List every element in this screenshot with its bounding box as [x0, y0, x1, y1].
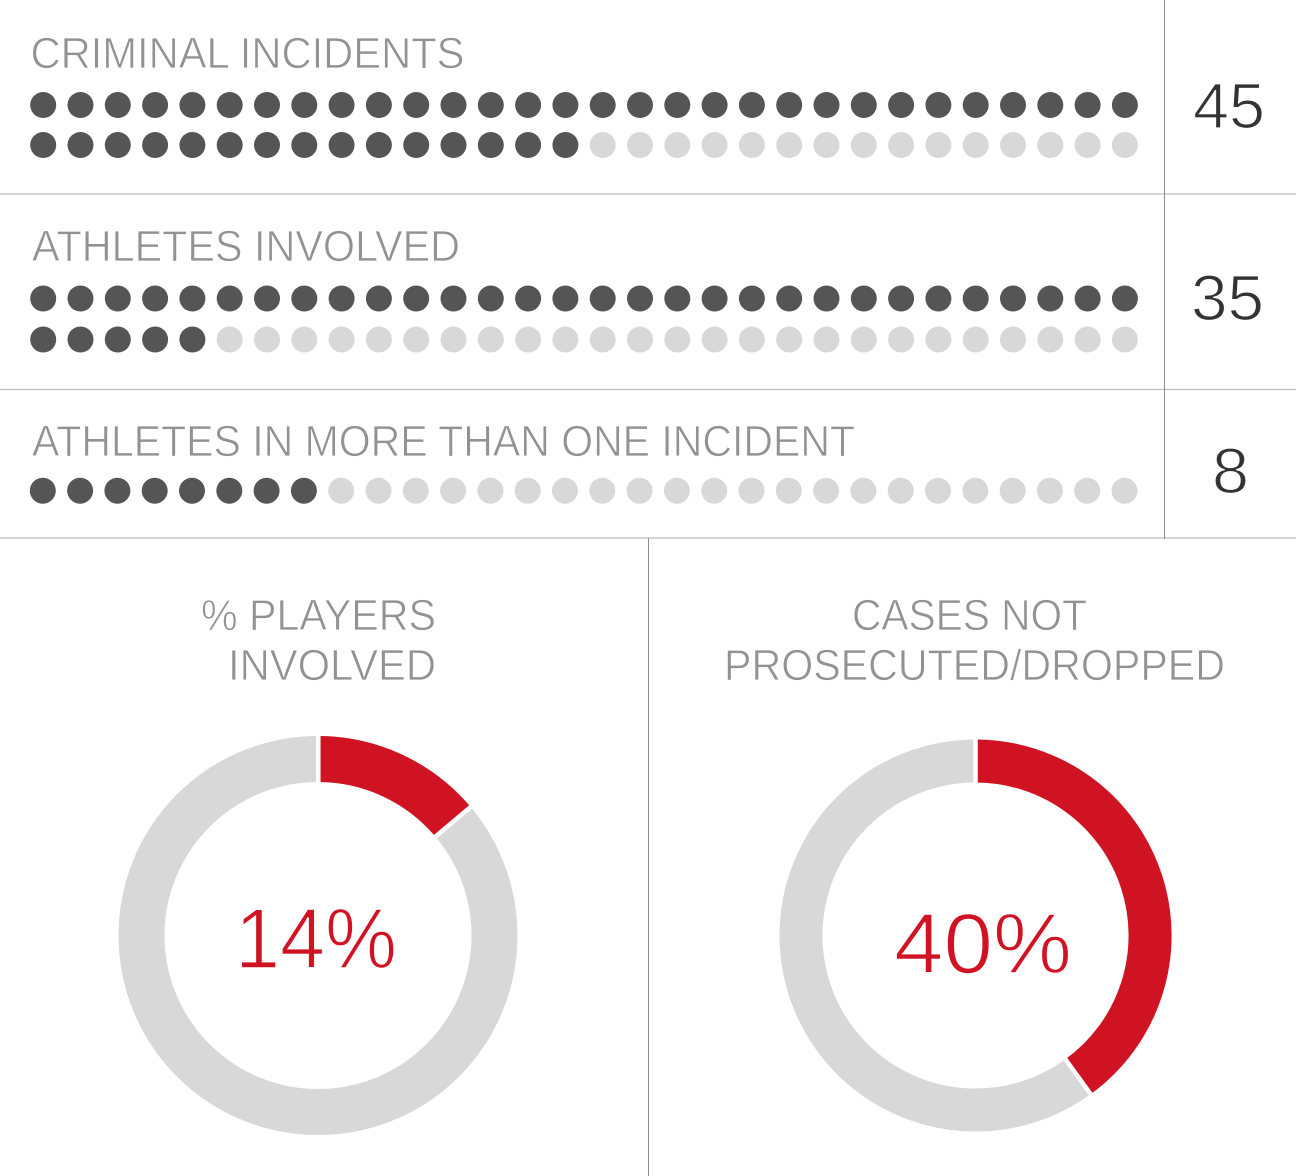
value: 40%: 40%	[894, 897, 1072, 992]
donut chart: 14%	[142, 732, 494, 1112]
heading: cases not prosecuted/dropped: CASES NOT	[852, 591, 1087, 640]
heading: cases not prosecuted/dropped	[724, 591, 1225, 690]
dot row: 8 of 30 athletes	[30, 478, 1137, 504]
panel: criminal incidents	[30, 29, 1265, 158]
heading: % players involved: % PLAYERS	[201, 591, 436, 640]
panel: athletes in more than one incident	[30, 417, 1249, 507]
number: 8: 8	[1212, 435, 1249, 507]
panel: athletes involved	[30, 222, 1264, 352]
number: 35: 35	[1191, 262, 1264, 334]
heading: athletes involved: ATHLETES INVOLVED	[32, 222, 460, 271]
dot row: first 30 athletes	[30, 286, 1138, 312]
dot row: first 30 incidents	[30, 92, 1138, 118]
value: 14%: 14%	[235, 892, 397, 987]
number: 45: 45	[1193, 70, 1265, 142]
panel: % players involved	[142, 591, 494, 1112]
heading: criminal incidents: CRIMINAL INCIDENTS	[30, 29, 464, 78]
heading: % players involved: INVOLVED	[228, 641, 436, 690]
dot row: remaining 5 athletes	[30, 326, 1138, 352]
heading: cases not prosecuted/dropped: PROSECUTED/DROPPED	[724, 641, 1225, 690]
dot row: remaining 15 incidents	[30, 132, 1138, 158]
heading: athletes in more than one incident: ATHLETES IN MORE THAN ONE INCIDENT	[32, 417, 855, 466]
heading: % players involved	[201, 591, 436, 690]
donut chart: 40%	[801, 736, 1150, 1110]
panel: cases not prosecuted or dropped	[724, 591, 1225, 1110]
